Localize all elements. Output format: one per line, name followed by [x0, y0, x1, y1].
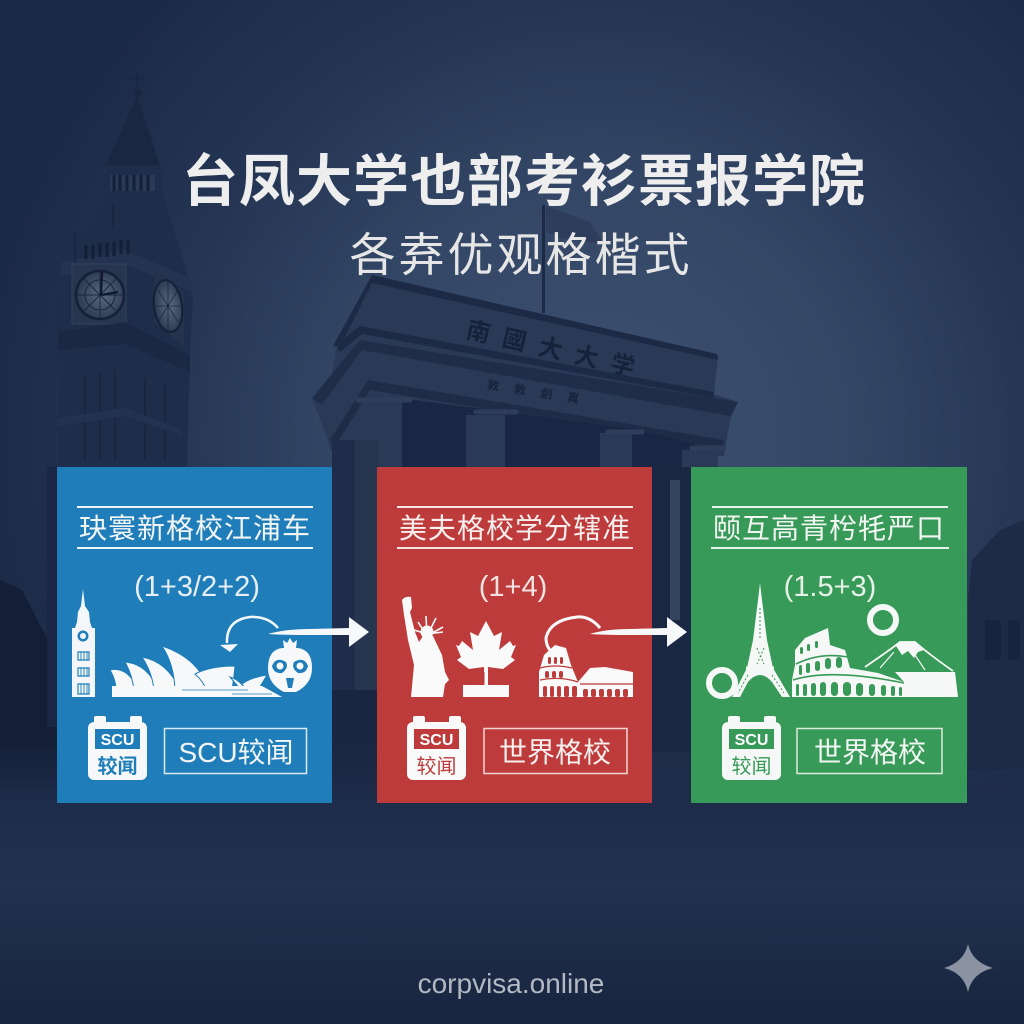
- arrow: blue to red: [268, 617, 369, 647]
- panel: blue pathway: [57, 467, 332, 803]
- icon: SCU badge: 较闻: [98, 754, 138, 778]
- icon: eiffel tower: [732, 583, 790, 697]
- icon: rings: [709, 607, 896, 696]
- icon: mount fuji: [865, 642, 958, 697]
- background photo: university gate: 敦敦創真: [486, 377, 595, 408]
- blue panel formula: (1+3/2+2): [134, 571, 260, 603]
- icon: SCU badge: [88, 716, 147, 780]
- icon: clock tower: [72, 589, 95, 697]
- icon: mask emblem: [268, 638, 312, 692]
- red panel heading: 美夫格校学分辖准: [399, 513, 631, 544]
- background photo: university gate: 南國大大学: [464, 317, 650, 385]
- label box: [797, 728, 942, 774]
- label box: SCU较闻: [178, 737, 294, 768]
- icon: colosseum with arc: [539, 617, 633, 697]
- icon: statue of liberty: [402, 597, 449, 697]
- label box: 世界格校: [814, 737, 926, 768]
- label box: [484, 728, 627, 774]
- footer url: corpvisa.online: [418, 968, 604, 999]
- background photo: lower silhouettes: [0, 440, 1024, 802]
- icon: SCU badge: [407, 716, 466, 780]
- label box: 世界格校: [499, 737, 611, 768]
- icon: SCU badge: SCU: [420, 732, 453, 749]
- subtitle: 各弆优观格楷式: [350, 229, 692, 281]
- arrow: red to green: [590, 617, 687, 647]
- panel: red pathway: [377, 467, 652, 803]
- icon: SCU badge: SCU: [101, 732, 134, 749]
- icon: SCU badge: 较闻: [416, 755, 456, 778]
- ground: [0, 740, 1024, 1024]
- title: 台凤大学也部考衫票报学院: [182, 150, 866, 213]
- blue panel heading: 玦寰新格校江浦车: [79, 513, 311, 544]
- background photo: clock tower: [57, 70, 193, 467]
- icon: SCU badge: 较闻: [732, 755, 772, 778]
- icon: SCU badge: SCU: [735, 732, 768, 749]
- red panel formula: (1+4): [479, 571, 547, 603]
- icon: opera house: [110, 646, 282, 697]
- icon: maple leaf: [456, 621, 516, 697]
- panel: green pathway: [691, 467, 967, 803]
- background photo: university gate: [312, 275, 738, 472]
- green panel heading: 颐互高青枍牦严口: [713, 513, 945, 544]
- icon: sparkle: [944, 944, 993, 992]
- label box: [164, 728, 306, 774]
- icon: curved arrow: [220, 617, 278, 652]
- icon: colosseum: [792, 628, 904, 697]
- icon: SCU badge: [722, 716, 781, 780]
- green panel formula: (1.5+3): [784, 571, 876, 603]
- background photo: flag pole: [542, 205, 604, 313]
